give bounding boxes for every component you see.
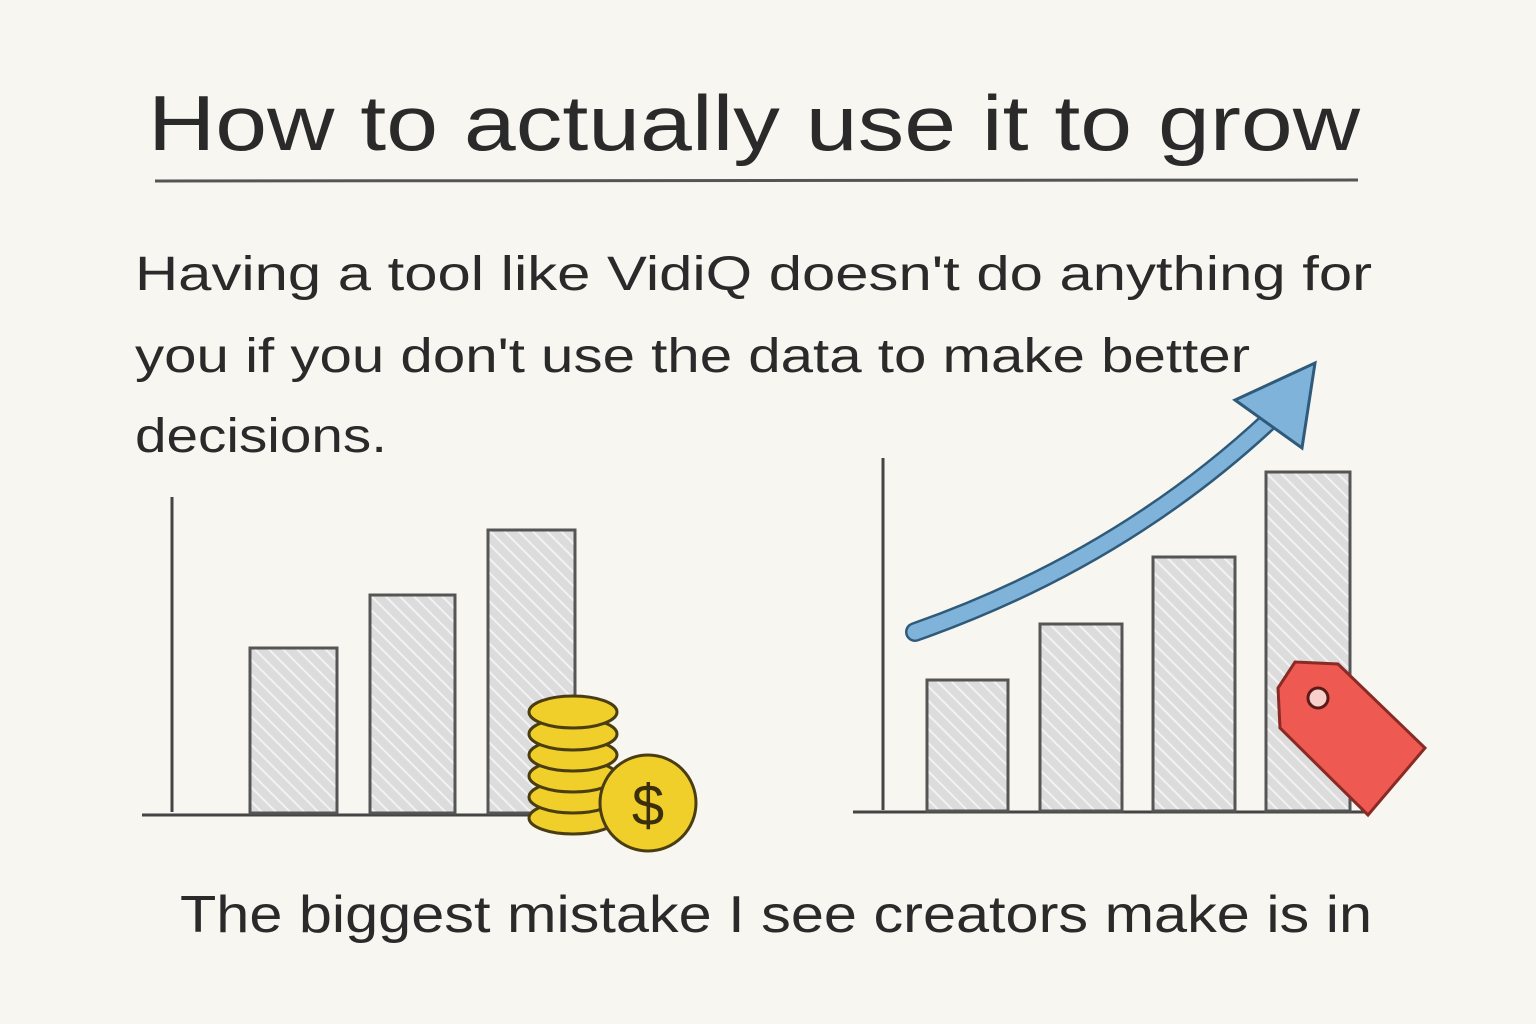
bottom text: The biggest mistake I see creators make is in (180, 886, 1372, 944)
icon: coins (529, 696, 696, 851)
intro text (135, 248, 1372, 463)
right bar chart (853, 458, 1365, 812)
intro text: Having a tool like VidiQ doesn't do anything for (135, 248, 1372, 301)
icon: coins: $ (632, 773, 664, 838)
intro text: decisions. (135, 410, 387, 463)
arrow: growth (915, 363, 1315, 632)
icon: price tag (1278, 662, 1425, 815)
intro text: you if you don't use the data to make better (135, 330, 1250, 383)
left bar chart (142, 497, 580, 815)
title: How to actually use it to grow (148, 79, 1361, 167)
